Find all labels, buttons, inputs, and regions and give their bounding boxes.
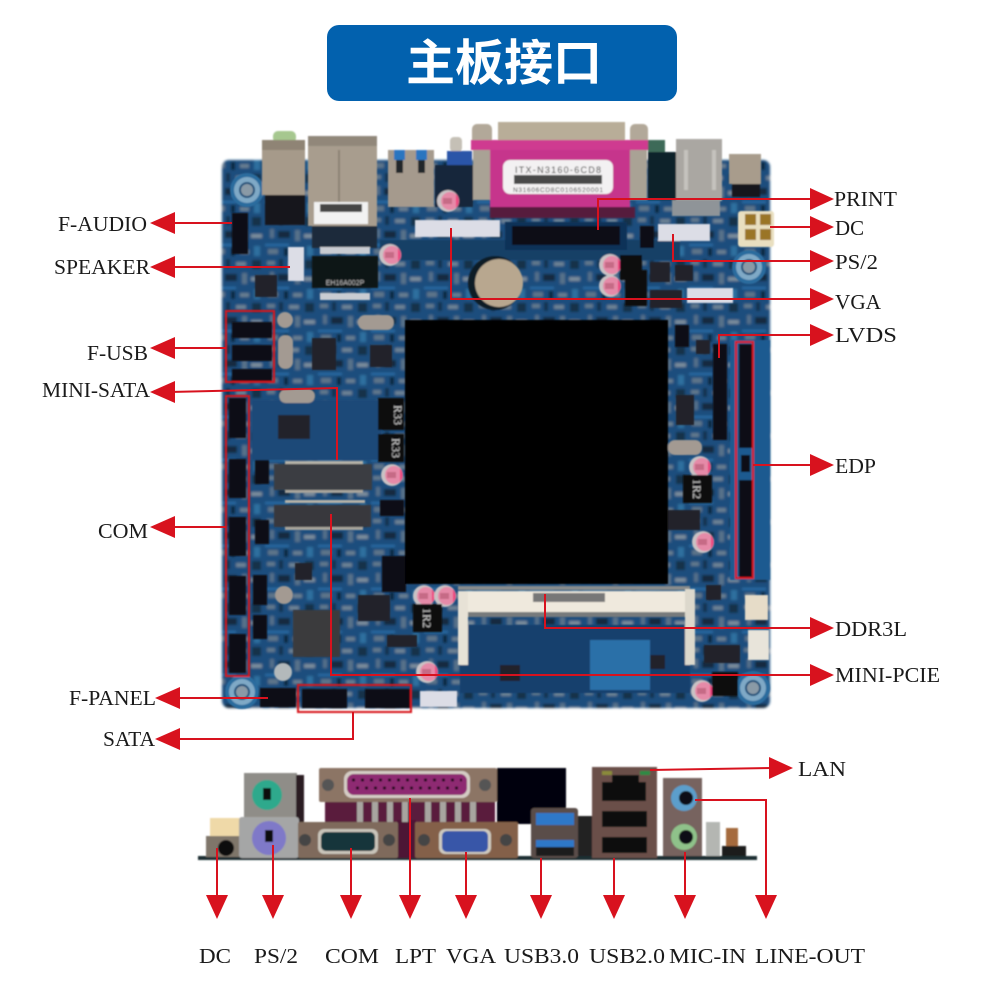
right interface labels: EDP: [835, 454, 876, 478]
CPU heatsink: [405, 320, 668, 584]
left interface labels: F-AUDIO: [58, 212, 147, 236]
capacitors: [379, 244, 714, 702]
interface red frames: [226, 311, 753, 712]
left interface labels: SATA: [103, 727, 156, 751]
white connectors: [288, 220, 769, 707]
coin battery: [468, 256, 523, 310]
top LAN connector: [308, 136, 377, 248]
top audio/USB connector: [262, 131, 305, 225]
rear USB 3.0 stack: [531, 808, 592, 858]
bottom interface labels: USB3.0: [504, 944, 579, 968]
mini-SATA and mini-PCIe slots: [274, 461, 372, 530]
downward arrowheads: [206, 895, 777, 919]
darker board regions: [252, 222, 770, 693]
R33 chokes: [378, 398, 405, 462]
rear PS/2 ports: [239, 773, 304, 858]
R33 chokes: R33: [391, 405, 405, 425]
board edge: [198, 856, 757, 860]
top parallel port: N31606CD8C0106520001: [513, 187, 603, 194]
top parallel port: [471, 122, 648, 218]
rear LAN and USB 2.0 stack: [592, 767, 657, 858]
motherboard base: [222, 160, 770, 708]
crystals: [274, 312, 702, 681]
bottom interface labels: DC: [199, 944, 231, 968]
top USB connector: [388, 150, 434, 207]
top parallel port: ITX-N3160-6CD8: [515, 165, 601, 175]
1R2 chokes: 1R2: [420, 608, 434, 628]
rear I/O panel photo: [198, 767, 757, 860]
right arrowheads: [769, 188, 834, 779]
transformer chip: EH16A002P: [326, 280, 365, 287]
black pin headers: [229, 213, 752, 708]
rear LPT port: [319, 768, 497, 858]
rear DC jack: [206, 818, 240, 857]
transformer chip: [312, 247, 378, 300]
right interface labels: MINI-PCIE: [835, 663, 940, 687]
rear COM port: [298, 822, 398, 858]
motherboard photo: [225, 122, 774, 712]
bottom interface labels: USB2.0: [589, 944, 665, 968]
right interface labels: LAN: [798, 757, 846, 781]
left arrowheads: [150, 212, 180, 750]
rear audio jacks: [663, 778, 702, 856]
1R2 chokes: [413, 475, 712, 632]
small rear capacitors: [706, 822, 746, 856]
rear VGA port: [415, 822, 518, 858]
left interface labels: SPEAKER: [54, 255, 150, 279]
top VGA connector: [435, 137, 473, 212]
callout lines: [170, 199, 815, 900]
bottom interface labels: LPT: [395, 944, 436, 968]
left interface labels: F-USB: [87, 341, 148, 365]
top DC jack: [729, 154, 761, 197]
DC power connector: [738, 211, 774, 247]
title banner: 主板接口: [406, 37, 602, 91]
bottom interface labels: LINE-OUT: [755, 944, 865, 968]
title banner: [327, 25, 677, 101]
left interface labels: MINI-SATA: [42, 378, 151, 402]
right interface labels: DC: [835, 216, 864, 240]
R33 chokes: R33: [389, 438, 403, 458]
bottom interface labels: PS/2: [254, 944, 298, 968]
left interface labels: [42, 212, 156, 751]
right interface labels: PS/2: [835, 250, 878, 274]
left interface labels: F-PANEL: [69, 686, 156, 710]
screw holes: [225, 173, 770, 709]
integrated circuits: [255, 255, 740, 696]
top RJ45 block: [672, 139, 722, 216]
black rear tower: [497, 768, 566, 824]
right interface labels: DDR3L: [835, 617, 907, 641]
bottom interface labels: MIC-IN: [669, 944, 746, 968]
right interface labels: LVDS: [835, 323, 897, 347]
1R2 chokes: 1R2: [690, 479, 704, 499]
left interface labels: COM: [98, 519, 148, 543]
bottom interface labels: VGA: [446, 944, 497, 968]
right interface labels: [798, 187, 940, 781]
bottom interface labels: COM: [325, 944, 379, 968]
right interface labels: VGA: [835, 290, 882, 314]
DDR3L slot: [458, 586, 695, 665]
top COM connector: [648, 140, 676, 200]
right interface labels: PRINT: [834, 187, 897, 211]
bottom interface labels: [199, 944, 865, 968]
